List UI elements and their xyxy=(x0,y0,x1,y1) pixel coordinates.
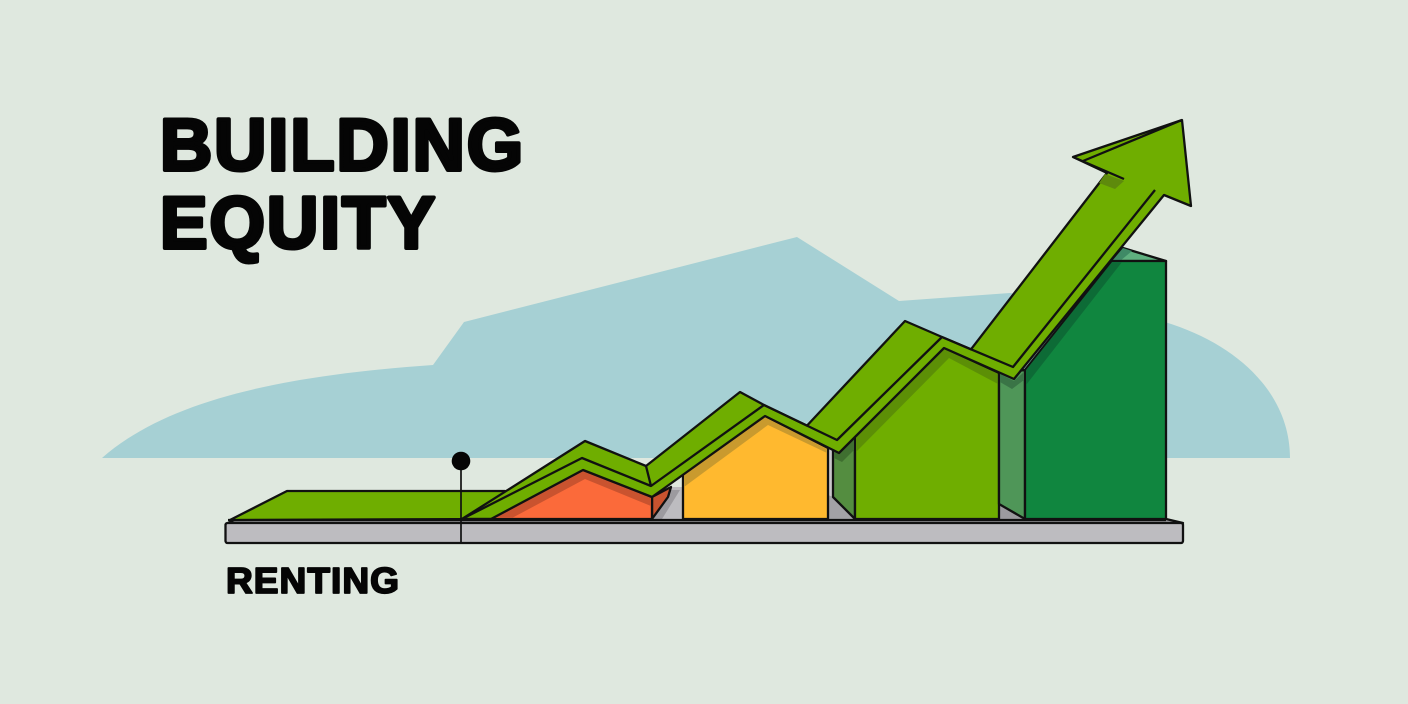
base platform xyxy=(226,448,1183,543)
bar: light green block xyxy=(833,348,999,519)
label: Renting: RENTING xyxy=(226,560,400,601)
arrow notch shadow xyxy=(1099,174,1124,189)
bar: dark green block xyxy=(999,248,1166,519)
bar: yellow house xyxy=(683,416,828,519)
flat green renting slab xyxy=(230,491,505,520)
title: Building Equity: EQUITY xyxy=(160,183,437,264)
bar: orange house xyxy=(491,470,671,519)
title: Building Equity xyxy=(160,105,525,264)
title: Building Equity: BUILDING xyxy=(160,105,525,186)
marker pin xyxy=(452,452,470,543)
growth arrow ribbon xyxy=(462,120,1191,519)
background hill silhouette xyxy=(102,237,1290,458)
ribbon fold lines xyxy=(462,120,1182,519)
